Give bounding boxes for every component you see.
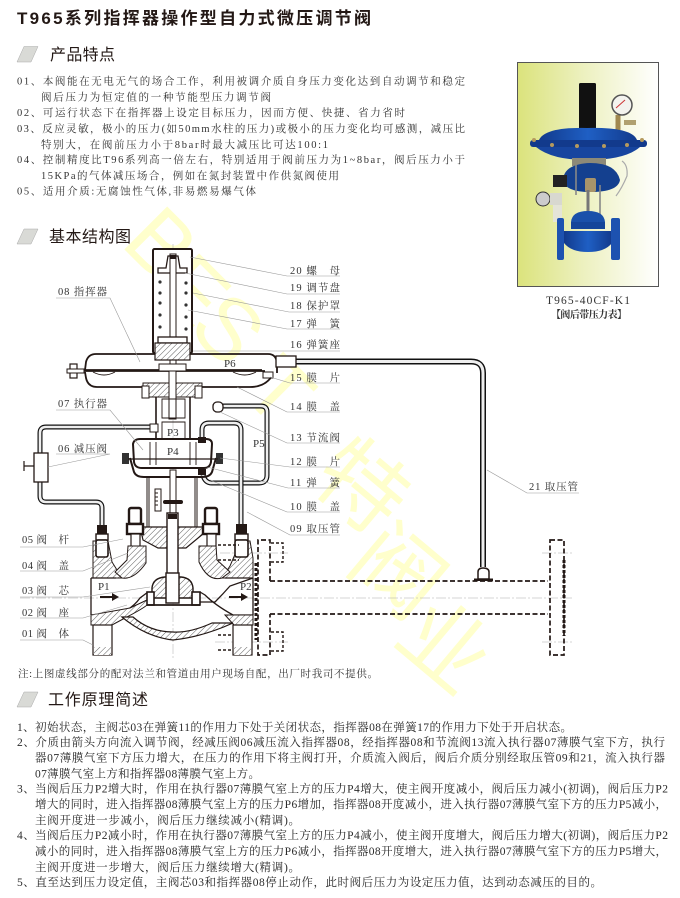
valve body — [91, 541, 253, 655]
heading: product features: 产品特点 — [50, 46, 115, 64]
part labels: right column: 10 膜 盖 — [290, 500, 340, 513]
pressure tubes — [40, 362, 483, 567]
actuator — [122, 397, 223, 477]
text block: product features: 03、反应灵敏，极小的压力(如50mm水柱的压力)或极小的压力变化均可感测，减压比 — [17, 122, 465, 135]
watermark: 业 — [379, 580, 510, 713]
photo caption: 【阀后带压力表】 — [551, 308, 627, 321]
pressure markers — [98, 358, 265, 593]
pressure markers: P1 — [98, 581, 110, 593]
yoke and stem — [147, 470, 197, 527]
bonnet with studs — [127, 508, 219, 575]
watermark: 特 — [296, 420, 427, 553]
heading: basic structure — [17, 228, 131, 246]
pressure markers: P2 — [240, 581, 252, 593]
part labels: right column: 20 螺 母 — [290, 264, 340, 277]
text block: product features: 15KPa的气体减压场合，例如在氮封装置中作供氮阀使用 — [41, 169, 339, 182]
part labels: right column: 21 取压管 — [529, 480, 578, 493]
pressure markers: P4 — [167, 446, 179, 458]
photo: valve product — [518, 62, 658, 286]
part labels: left column: 02 阀 座 — [22, 606, 70, 619]
photo caption — [546, 295, 630, 321]
part labels: left column: 05 阀 杆 — [22, 533, 70, 546]
text block: product features: 01、本阀能在无电无气的场合工作，利用被调介质自身压力变化达到自动调节和稳定 — [17, 74, 466, 88]
watermark — [106, 188, 510, 713]
part labels: right column: 18 保护罩 — [290, 299, 340, 312]
text block: working principle: 2、介质由箭头方向流入调节阀，经减压阀06减压流入指挥器08，经指挥器08和节流阀13流入执行器07薄膜气室下方，执行 — [17, 735, 666, 749]
side fittings — [96, 524, 248, 557]
part labels: left column: 07 执行器 — [58, 397, 108, 410]
part labels: left column: 03 阀 芯 — [22, 584, 70, 597]
part labels: right column: 09 取压管 — [290, 522, 340, 535]
tapping fitting on pipe — [474, 568, 493, 581]
pressure reducing valve — [24, 453, 48, 482]
text block: product features: 04、控制精度比T96系列高一倍左右，特别适用于阀前压力为1~8bar，阀后压力小于 — [17, 153, 465, 166]
text block: product features — [17, 74, 466, 198]
text block: working principle: 增大的同时，进入指挥器08薄膜气室上方的压力P6增加，指挥器08开度减小，进入执行器07薄膜气室下方的压力P5减小， — [35, 797, 667, 811]
text block: working principle: 主阀开度进一步增大，阀后压力继续增大(精调)。 — [35, 860, 300, 874]
part labels: right column: 14 膜 盖 — [290, 400, 340, 413]
part labels: right column: 13 节流阀 — [290, 431, 340, 444]
part labels: left column: 08 指挥器 — [58, 285, 108, 298]
part labels: right column — [290, 264, 578, 535]
part labels: right column: 12 膜 片 — [290, 455, 340, 468]
text block: product features: 阀后压力为恒定值的一种节能型压力调节阀 — [41, 90, 271, 104]
text block: working principle: 减小的同时，进入指挥器08薄膜气室上方的压力P6减小，指挥器08开度增大，进入执行器07薄膜气室下方的压力P5增大， — [35, 844, 667, 858]
part labels: right column: 15 膜 片 — [290, 371, 340, 384]
pressure markers: P6 — [224, 358, 236, 370]
watermark: 阀 — [332, 505, 463, 638]
pressure markers: P3 — [167, 427, 179, 439]
watermark: S — [173, 273, 284, 384]
part labels: right column: 17 弹 簧 — [290, 317, 340, 330]
part labels: right column: 16 弹簧座 — [290, 338, 340, 351]
part labels: left column — [22, 285, 108, 640]
leader lines — [20, 257, 579, 645]
part labels: right column: 11 弹 簧 — [290, 476, 340, 489]
center lines — [20, 244, 572, 660]
text block: product features: 特别大，在阀前压力小于8bar时最大减压比可达100:1 — [41, 138, 328, 151]
part labels: left column: 01 阀 体 — [22, 627, 70, 640]
text block: working principle: 5、直至达到压力设定值，主阀芯03和指挥器08停止动作，此时阀后压力为设定压力值，达到动态减压的目的。 — [17, 875, 602, 889]
text block: product features: 05、适用介质:无腐蚀性气体,非易燃易爆气体 — [17, 184, 256, 198]
text block: working principle: 3、当阀后压力P2增大时，作用在执行器07薄膜气室上方的压力P4增大，使主阀开度减小，阀后压力减小(初调)，阀后压力P2 — [17, 782, 668, 796]
valve plug and seat — [147, 573, 200, 605]
heading: product features — [17, 46, 115, 64]
part labels: left column: 04 阀 盖 — [22, 559, 70, 572]
watermark: B — [106, 188, 217, 299]
dashed pipe and flanges — [218, 540, 564, 655]
heading: basic structure: 基本结构图 — [49, 228, 131, 246]
text block: working principle: 主阀开度进一步减小，阀后压力继续减小(精调)。 — [35, 813, 300, 827]
text block: working principle: 器07薄膜气室下方压力增大，在压力的作用下将主阀打开，介质流入阀后，阀后介质分别经取压管09和21，流入执行器 — [35, 750, 666, 764]
heading: working principle: 工作原理简述 — [48, 691, 148, 709]
title: T965系列指挥器操作型自力式微压调节阀 — [17, 8, 371, 28]
text block: working principle: 1、初始状态，主阀芯03在弹簧11的作用力下处于关闭状态，指挥器08在弹簧17的作用力下处于开启状态。 — [17, 720, 572, 734]
pressure markers: P5 — [253, 438, 265, 450]
part labels: right column: 19 调节盘 — [290, 281, 340, 294]
watermark: T — [226, 336, 334, 444]
text block: working principle: 07薄膜气室上方和指挥器08薄膜气室上方。 — [35, 766, 260, 780]
text block: working principle — [17, 720, 668, 889]
flow arrows — [100, 593, 248, 601]
photo caption: T965-40CF-K1 — [546, 295, 630, 307]
pilot: protective cover and spring — [153, 249, 192, 366]
watermark: E — [138, 235, 249, 346]
structure diagram — [20, 244, 572, 660]
text block: product features: 02、可运行状态下在指挥器上设定目标压力，因而方便、快捷、省力省时 — [17, 106, 406, 119]
note: 注:上图虚线部分的配对法兰和管道由用户现场自配，出厂时我司不提供。 — [18, 667, 378, 680]
part labels: left column: 06 减压阀 — [58, 442, 107, 455]
pilot: diaphragm housing — [67, 354, 296, 419]
text block: working principle: 4、当阀后压力P2减小时，作用在执行器07薄膜气室上方的压力P4减小，使主阀开度增大，阀后压力增大(初调)，阀后压力P2 — [17, 828, 668, 842]
